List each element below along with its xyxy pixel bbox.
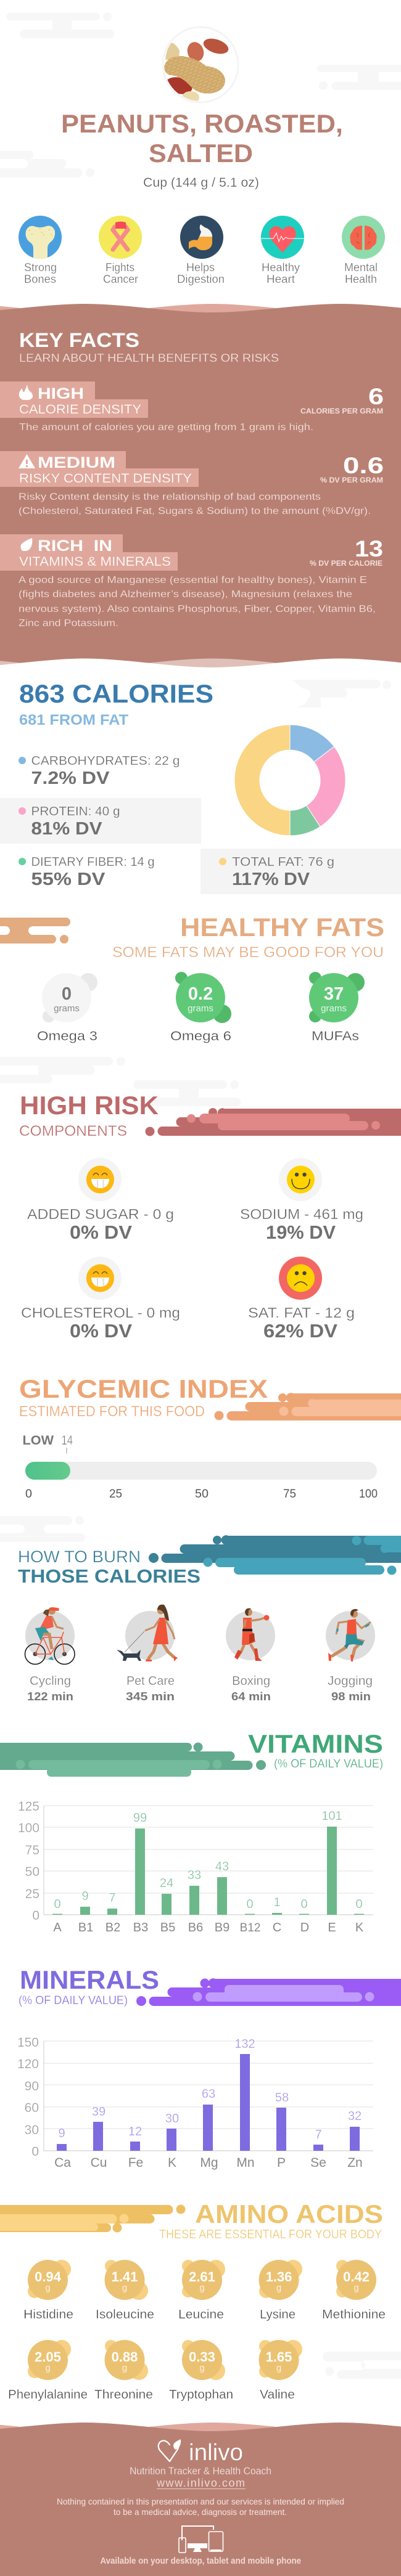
item: sodium: SODIUM - 461 mg — [240, 1206, 363, 1222]
icon: strong bones — [19, 216, 62, 262]
gauge: glycemic index: 50 — [195, 1488, 209, 1501]
bar chart: vitamins: 100 — [18, 1821, 39, 1835]
bar chart: minerals: 30 — [25, 2123, 39, 2137]
subheading: glycemic index: ESTIMATED FOR THIS FOOD — [19, 1403, 205, 1420]
item: lysine — [259, 2260, 302, 2321]
bar chart: minerals: 132 — [234, 2037, 255, 2051]
item: saturated fat: 62% DV — [263, 1320, 337, 1342]
description: vitamins and minerals: Zinc and Potassium. — [19, 618, 118, 629]
heading: healthy fats: HEALTHY FATS — [180, 913, 384, 942]
label: mental health: Mental — [344, 261, 378, 274]
bar chart: vitamins: 125 — [18, 1800, 39, 1814]
item: isoleucine: g — [122, 2283, 127, 2293]
logo: inlivo — [159, 2439, 243, 2466]
stat: omega 3: grams — [54, 1003, 80, 1014]
food photo: peanuts — [163, 27, 238, 104]
label: fights cancer: Cancer — [103, 273, 138, 285]
icon: healthy heart — [261, 216, 304, 259]
bar chart: vitamins: K — [355, 1921, 364, 1934]
item: phenylalanine: g — [45, 2363, 51, 2373]
label: mental health — [344, 261, 378, 285]
item: valine: 1.65 — [266, 2349, 292, 2365]
bar chart: vitamins: 50 — [25, 1865, 39, 1879]
decoration: amino acids header banner — [0, 2205, 185, 2232]
stat: omega 3: Omega 3 — [37, 1029, 97, 1043]
bar chart: vitamins: B2 — [105, 1921, 120, 1934]
website link: www.inlivo.com — [156, 2477, 245, 2489]
label: strong bones: Bones — [24, 273, 56, 285]
availability note: Available on your desktop, tablet and mobile phone — [100, 2556, 301, 2566]
bar chart: vitamins: 43 — [215, 1860, 229, 1873]
item: threonine: 0.88 — [112, 2349, 138, 2365]
bar chart: minerals: 30 — [165, 2112, 179, 2126]
legend: total fat: TOTAL FAT: 76 g — [232, 855, 334, 869]
icon: devices — [179, 2526, 223, 2553]
item: isoleucine — [96, 2260, 154, 2321]
stat: omega 6: grams — [188, 1003, 213, 1014]
label: calorie density: CALORIE DENSITY — [19, 402, 141, 417]
panel: calories — [0, 679, 401, 894]
activity: boxing: Boxing — [232, 1674, 270, 1688]
activity: jogging — [326, 1609, 375, 1703]
activity: jogging: Jogging — [328, 1674, 373, 1688]
item: saturated fat: SAT. FAT - 12 g — [248, 1305, 355, 1321]
legend: carbohydrates — [19, 754, 180, 788]
bar chart: vitamins: 99 — [133, 1811, 147, 1825]
item: threonine: Threonine — [94, 2388, 153, 2402]
item: phenylalanine: Phenylalanine — [8, 2388, 88, 2402]
bar chart: vitamins: 1 — [273, 1896, 281, 1909]
gauge: glycemic index: 14 — [62, 1433, 73, 1448]
label: healthy heart — [262, 261, 300, 285]
bar chart: minerals: Zn — [347, 2156, 363, 2170]
bar chart: minerals: Mg — [200, 2156, 218, 2170]
label: helps digestion: Helps — [186, 261, 215, 274]
activity: boxing — [226, 1608, 275, 1703]
bar chart: vitamins: B6 — [188, 1921, 203, 1934]
bar chart: vitamins: 33 — [188, 1869, 201, 1882]
unit: percent DV per gram: % DV PER GRAM — [320, 476, 383, 484]
bar chart: vitamins: B12 — [240, 1922, 260, 1934]
decoration: burn header banner — [149, 1535, 401, 1575]
activity: cycling: 122 min — [27, 1690, 73, 1703]
activity: cycling: Cycling — [30, 1674, 71, 1688]
gauge: glycemic index: LOW — [22, 1433, 54, 1448]
bar chart: minerals: 9 — [58, 2127, 65, 2140]
item: lysine: 1.36 — [266, 2269, 292, 2285]
panel: minerals — [17, 1965, 401, 2170]
icon: leaf — [20, 538, 32, 551]
description: vitamins and minerals — [19, 575, 376, 629]
bar chart: vitamins: A — [53, 1921, 62, 1934]
gauge: glycemic index: 25 — [109, 1488, 122, 1501]
legend: dietary fiber: 55% DV — [31, 870, 105, 889]
description: risky content density: (Cholesterol, Saturated Fat, Sugars & Sodium) to the amount (%DV/gr). — [19, 506, 371, 516]
bar chart: minerals: Mn — [236, 2156, 255, 2170]
label: strong bones — [24, 261, 57, 285]
decoration: minerals header banner — [136, 1978, 401, 2006]
activity: pet care — [117, 1605, 178, 1703]
heading: how to burn: HOW TO BURN — [18, 1547, 141, 1566]
item: added sugar: 0% DV — [70, 1221, 132, 1243]
bar chart: vitamins: 0 — [300, 1897, 308, 1911]
label: helps digestion: Digestion — [177, 273, 225, 285]
stat: MUFAs — [309, 972, 365, 1043]
item: saturated fat — [248, 1257, 355, 1342]
item: threonine — [94, 2340, 153, 2402]
legend: dietary fiber — [19, 855, 154, 889]
activity: jogging: 98 min — [331, 1690, 371, 1703]
item: histidine: 0.94 — [35, 2269, 62, 2285]
item: valine — [259, 2340, 302, 2402]
bar chart: vitamins: 24 — [160, 1877, 173, 1890]
heading: vitamins: VITAMINS — [248, 1729, 383, 1758]
heading: high risk: HIGH RISK — [20, 1091, 159, 1120]
item: phenylalanine — [8, 2340, 88, 2402]
gauge: glycemic index — [22, 1433, 378, 1501]
description: vitamins and minerals: (fights diabetes and Alzheimer’s disease), Magnesium (relaxes the — [19, 589, 352, 600]
item: methionine — [322, 2260, 386, 2321]
label: vitamins and minerals: VITAMINS & MINERALS — [19, 555, 171, 569]
subheading: components: COMPONENTS — [19, 1123, 127, 1139]
label: healthy heart: Heart — [267, 273, 295, 285]
item: added sugar — [27, 1158, 174, 1243]
bar chart: vitamins: E — [328, 1921, 336, 1934]
bar chart: vitamins: 7 — [109, 1891, 116, 1905]
panel: how to burn those calories — [18, 1535, 401, 1703]
bar chart: minerals: Cu — [91, 2156, 107, 2170]
subheading: healthy fats: SOME FATS MAY BE GOOD FOR YOU — [112, 944, 384, 961]
value: calories per gram: 6 — [368, 384, 384, 409]
heading: glycemic index: GLYCEMIC INDEX — [19, 1374, 268, 1403]
gauge: glycemic index: 0 — [25, 1488, 32, 1501]
item: sodium — [240, 1158, 363, 1243]
item: histidine — [23, 2260, 73, 2321]
description: risky content density — [19, 492, 371, 516]
decoration: vitamins header banner — [0, 1743, 266, 1777]
item: isoleucine: Isoleucine — [96, 2308, 154, 2321]
disclaimer: Nothing contained in this presentation and our services is intended or implied — [57, 2497, 344, 2506]
bar chart: minerals: 32 — [348, 2109, 362, 2123]
item: leucine — [178, 2260, 225, 2321]
fact: risky content density — [0, 451, 384, 516]
rating: rich in: RICH IN — [38, 537, 112, 555]
activity: boxing: 64 min — [231, 1690, 271, 1703]
panel: high risk components — [19, 1091, 401, 1342]
bar chart: minerals: P — [277, 2156, 286, 2170]
bar chart: vitamins: 0 — [246, 1897, 254, 1911]
item: threonine: g — [122, 2363, 127, 2373]
bar chart: vitamins: D — [300, 1921, 309, 1934]
panel: healthy fats — [0, 913, 384, 1043]
stat: MUFAs: 37 — [324, 984, 344, 1004]
fact: calorie density — [0, 381, 384, 433]
label: strong bones: Strong — [24, 261, 57, 274]
title: PEANUTS, ROASTED, — [61, 109, 343, 138]
bar chart: minerals: Fe — [128, 2156, 143, 2170]
stat: MUFAs: grams — [321, 1003, 347, 1014]
panel: footer — [0, 2423, 401, 2576]
item: histidine: Histidine — [23, 2308, 73, 2321]
item: tryptophan: g — [199, 2363, 205, 2373]
stat: omega 3: 0 — [62, 984, 72, 1004]
rating: medium: MEDIUM — [38, 454, 115, 471]
label: risky content density: RISKY CONTENT DENSITY — [19, 471, 192, 486]
disclaimer: to be a medical advice, diagnosis or treatment. — [114, 2507, 287, 2517]
stat: omega 6: 0.2 — [188, 984, 213, 1004]
activity: pet care: 345 min — [126, 1690, 175, 1703]
title — [61, 109, 343, 168]
subheading: percent of daily value: (% OF DAILY VALUE) — [274, 1758, 383, 1771]
label: healthy heart: Healthy — [262, 261, 300, 274]
label: fights cancer: Fights — [105, 261, 134, 274]
bar chart: minerals: 60 — [25, 2101, 39, 2115]
decoration: glycemic header banner — [215, 1393, 401, 1420]
value: percent DV per calorie: 13 — [355, 536, 383, 561]
value: percent DV per gram: 0.6 — [343, 453, 384, 478]
description: vitamins and minerals: nervous system). Also contains Phosphorus, Fiber, Copper, Vitamin B6, — [19, 604, 376, 614]
bar chart: vitamins: 75 — [25, 1843, 39, 1857]
gauge: glycemic index: 100 — [359, 1488, 378, 1501]
title: SALTED — [149, 139, 253, 168]
bar chart: vitamins: C — [273, 1921, 281, 1934]
decoration: high risk header banner — [146, 1108, 401, 1136]
item: tryptophan: 0.33 — [189, 2349, 215, 2365]
legend: dietary fiber: DIETARY FIBER: 14 g — [31, 855, 154, 869]
item: isoleucine: 1.41 — [112, 2269, 138, 2285]
icon: warning — [19, 454, 35, 468]
bar chart: vitamins: B5 — [160, 1921, 175, 1934]
label: fights cancer — [103, 261, 138, 285]
label: helps digestion — [177, 261, 225, 285]
legend: total fat — [219, 855, 334, 889]
bar chart: minerals: 7 — [315, 2128, 322, 2142]
legend: protein — [19, 805, 120, 839]
legend: protein: PROTEIN: 40 g — [31, 805, 120, 818]
bar chart: vitamins: 0 — [54, 1897, 61, 1911]
bar chart: minerals: K — [168, 2156, 176, 2170]
heading: minerals: MINERALS — [20, 1965, 159, 1994]
bar chart: minerals: 58 — [275, 2091, 289, 2105]
logo: inlivo: inlivo — [189, 2440, 243, 2466]
bar chart: minerals: 90 — [25, 2079, 39, 2093]
item: lysine: g — [276, 2283, 281, 2293]
item: sodium: 19% DV — [266, 1221, 336, 1243]
description: risky content density: Risky Content density is the relationship of bad components — [19, 492, 321, 502]
item: leucine: Leucine — [178, 2308, 224, 2321]
item: leucine: g — [199, 2283, 205, 2293]
subheading: percent of daily value: (% OF DAILY VALUE) — [19, 1994, 128, 2007]
item: added sugar: ADDED SUGAR - 0 g — [27, 1206, 174, 1222]
bar chart: vitamins: 101 — [321, 1809, 342, 1823]
donut chart — [234, 725, 345, 836]
panel: vitamins — [0, 1729, 383, 1934]
bar chart: minerals: 120 — [17, 2057, 39, 2071]
gauge: glycemic index: 75 — [283, 1488, 296, 1501]
item: cholesterol: CHOLESTEROL - 0 mg — [21, 1305, 180, 1321]
bar chart: minerals: 0 — [31, 2145, 39, 2159]
icon: helps digestion — [180, 216, 223, 259]
item: cholesterol — [21, 1257, 180, 1342]
item: methionine: Methionine — [322, 2308, 386, 2321]
panel: key facts — [0, 304, 401, 678]
stat: MUFAs: MUFAs — [312, 1029, 359, 1043]
serving size: Cup (144 g / 5.1 oz) — [143, 176, 259, 190]
item: tryptophan — [169, 2340, 233, 2402]
label: mental health: Health — [345, 273, 377, 285]
legend: protein: 81% DV — [31, 819, 102, 839]
icon: flame — [19, 385, 33, 400]
icon: mental health — [342, 216, 385, 259]
bar chart: minerals: Ca — [54, 2156, 71, 2170]
stat: omega 3 — [37, 973, 97, 1043]
subheading: calories from fat: 681 FROM FAT — [19, 712, 128, 728]
tagline: Nutrition Tracker & Health Coach — [130, 2465, 271, 2477]
description: calorie density: The amount of calories you are getting from 1 gram is high. — [19, 422, 313, 433]
subheading: amino acids: THESE ARE ESSENTIAL FOR YOUR BODY — [159, 2228, 382, 2241]
legend: carbohydrates: 7.2% DV — [31, 768, 110, 788]
bar chart: minerals: 39 — [92, 2105, 105, 2119]
bar chart: vitamins: B1 — [78, 1921, 93, 1934]
item: methionine: 0.42 — [343, 2269, 370, 2285]
disclaimer — [57, 2497, 344, 2517]
bar chart: vitamins: 0 — [32, 1909, 39, 1923]
item: phenylalanine: 2.05 — [35, 2349, 61, 2365]
bar chart: vitamins — [18, 1800, 373, 1934]
item: methionine: g — [353, 2283, 359, 2293]
bar chart: vitamins: B9 — [215, 1921, 229, 1934]
bar chart: minerals: Se — [310, 2156, 326, 2170]
item: cholesterol: 0% DV — [70, 1320, 132, 1342]
legend: carbohydrates: CARBOHYDRATES: 22 g — [31, 754, 180, 768]
unit: calories per gram: CALORIES PER GRAM — [300, 407, 383, 415]
item: leucine: 2.61 — [189, 2269, 215, 2285]
activity: pet care: Pet Care — [126, 1674, 175, 1688]
item: lysine: Lysine — [260, 2308, 296, 2321]
unit: percent DV per calorie: % DV PER CALORIE — [310, 559, 382, 568]
bar chart: vitamins: 9 — [81, 1889, 89, 1903]
heading: those calories: THOSE CALORIES — [18, 1565, 200, 1587]
icon: fights cancer — [99, 216, 142, 259]
stat: omega 6 — [170, 972, 231, 1043]
item: valine: Valine — [260, 2388, 295, 2402]
bar chart: minerals: 12 — [128, 2125, 142, 2138]
item: valine: g — [276, 2363, 281, 2373]
bar chart: vitamins: 0 — [355, 1897, 363, 1911]
heading: amino acids: AMINO ACIDS — [195, 2199, 383, 2228]
fact: rich in vitamins and minerals — [0, 534, 383, 629]
description: vitamins and minerals: A good source of Manganese (essential for healthy bones), Vitamin E — [19, 575, 367, 585]
stat: omega 6: Omega 6 — [170, 1029, 231, 1043]
rating: high: HIGH — [38, 385, 84, 402]
panel: amino acids — [0, 2199, 386, 2402]
activity: cycling — [25, 1607, 75, 1703]
panel: health benefits — [19, 216, 385, 285]
bar chart: vitamins: 25 — [25, 1887, 39, 1901]
heading: key facts: KEY FACTS — [19, 329, 139, 351]
bar chart: vitamins: B3 — [133, 1921, 148, 1934]
subheading: key facts: LEARN ABOUT HEALTH BENEFITS OR RISKS — [19, 352, 279, 364]
item: tryptophan: Tryptophan — [169, 2388, 233, 2402]
bar chart: minerals — [17, 2036, 373, 2170]
item: histidine: g — [45, 2283, 51, 2293]
bar chart: minerals: 150 — [17, 2036, 39, 2050]
panel: glycemic index — [19, 1374, 401, 1501]
legend: total fat: 117% DV — [232, 870, 310, 889]
heading: calories: 863 CALORIES — [19, 679, 213, 708]
bar chart: minerals: 63 — [202, 2087, 215, 2101]
